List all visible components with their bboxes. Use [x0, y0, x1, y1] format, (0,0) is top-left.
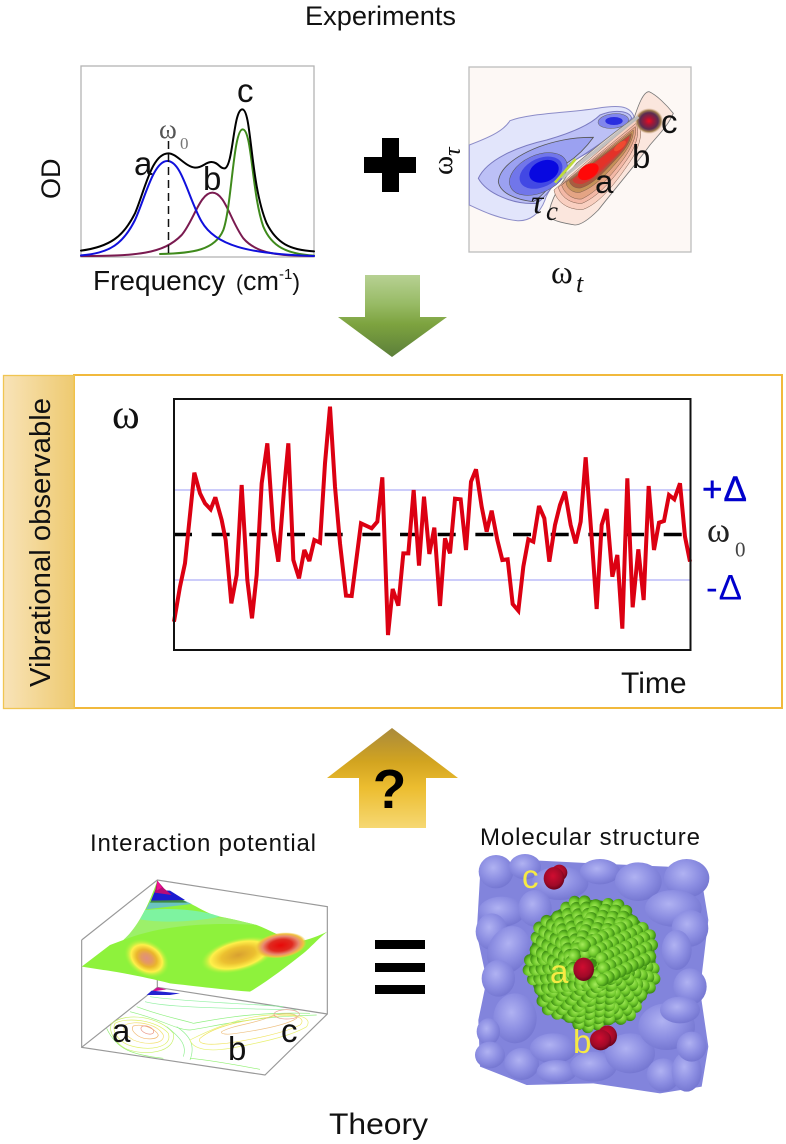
2D frame [469, 67, 691, 252]
heading: interaction potential: Interaction potential [90, 830, 316, 857]
axis unit: ) [292, 269, 300, 295]
label: tau c: τ [531, 184, 545, 221]
panel: vibrational observable [4, 375, 782, 708]
probe label b: b [573, 1023, 591, 1060]
panel: potential surface [82, 880, 327, 1075]
icon: equivalence [375, 940, 425, 994]
peak label b: b [203, 160, 221, 197]
solvent and micelle model [475, 854, 709, 1093]
probe label c: c [522, 858, 538, 895]
y label: omega: ω [112, 392, 140, 438]
axis label: omega tau: τ [440, 146, 466, 156]
omega-zero dashed marker [168, 141, 170, 256]
heading: molecular structure: Molecular structure [480, 824, 700, 851]
question mark: ? [373, 758, 406, 820]
axis label: frequency: Frequency [93, 265, 225, 296]
red probe c [544, 865, 567, 890]
side tab [4, 376, 74, 708]
axis label: omega t [551, 255, 584, 298]
contour label a: a [112, 1012, 131, 1049]
peak label c: c [237, 72, 254, 109]
axis unit: (cm [236, 266, 279, 296]
panel: molecular structure [475, 854, 709, 1093]
icon: plus [364, 138, 416, 192]
red probe a [573, 958, 594, 981]
panel frame [74, 375, 782, 708]
arrow: theory to observable [327, 728, 458, 828]
x label: time: Time [621, 667, 687, 700]
probe label a: a [550, 953, 569, 990]
subscript 0: 0 [180, 134, 188, 153]
spectrum curves [81, 109, 314, 256]
panel: 2D spectrum [427, 67, 691, 298]
green micelle [514, 883, 671, 1039]
red probe b [590, 1025, 617, 1050]
label: omega 0: ω [707, 510, 730, 550]
axis label: omega tau: ω [427, 156, 459, 175]
label: plus delta: +Δ [702, 470, 748, 509]
peak label a: a [595, 163, 614, 200]
side tab label: Vibrational observable [25, 398, 57, 687]
axis label: omega t: t [576, 269, 584, 298]
axis label: OD: OD [36, 158, 66, 199]
axis label: omega tau [427, 146, 466, 175]
title: Experiments: Experiments [305, 1, 456, 31]
label: omega 0: 0 [735, 538, 746, 562]
heading: theory: Theory [329, 1108, 428, 1141]
peak label c: c [661, 103, 678, 140]
peak label a: a [134, 145, 153, 182]
peak label b: b [632, 138, 650, 175]
spectrum frame [81, 66, 314, 257]
contour label c: c [281, 1012, 298, 1049]
label: minus delta: -Δ [706, 568, 743, 608]
time series chart [174, 399, 690, 650]
2D contour map [469, 92, 673, 225]
panel: absorption spectrum [36, 66, 314, 296]
label: omega 0: ω [159, 114, 177, 144]
label: tau c [531, 184, 558, 226]
label: tau c: c [546, 196, 558, 226]
axis label: omega t: ω [551, 255, 573, 291]
arrow: experiments to observable [338, 275, 447, 357]
contour label b: b [228, 1030, 246, 1067]
label: omega 0 [707, 510, 746, 562]
axis unit: -1 [279, 266, 292, 283]
